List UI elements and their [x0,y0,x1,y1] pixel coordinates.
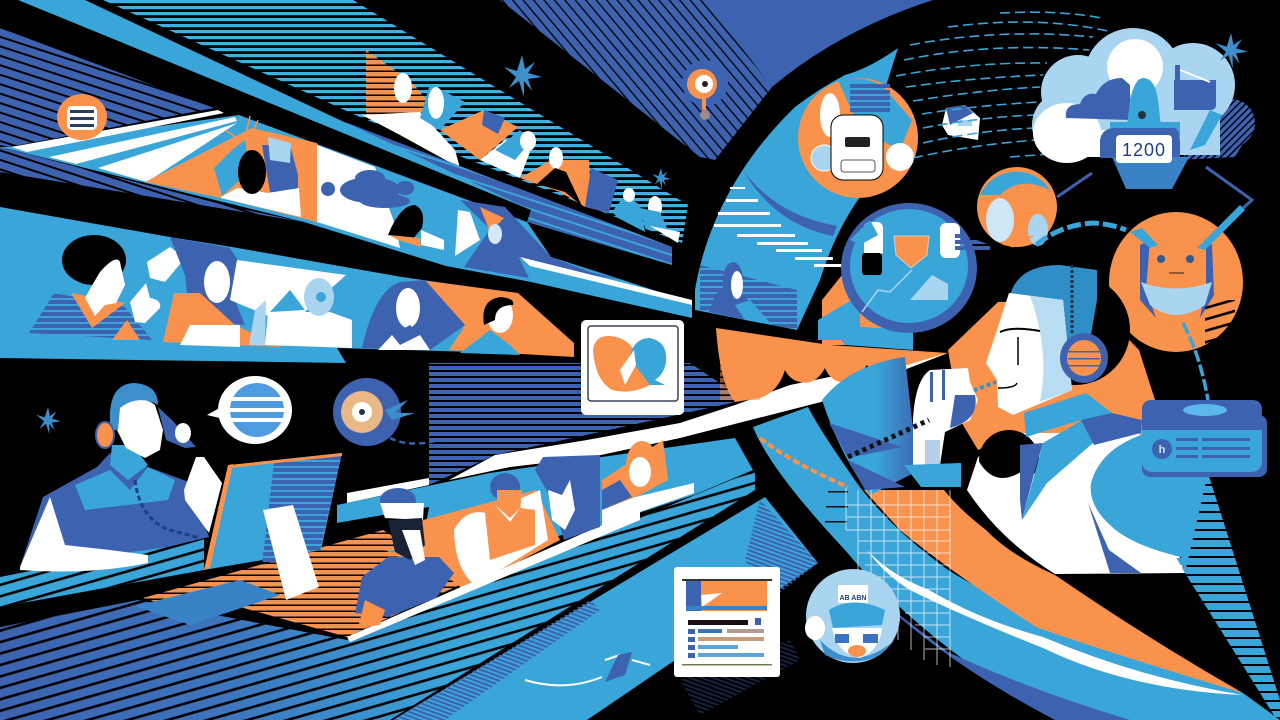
monitor [204,453,342,600]
dial icon [333,378,439,446]
counter display: 1200 [1122,140,1166,160]
white diagonal stripes [11,110,237,182]
white dashes [714,187,848,267]
hand [913,368,978,465]
keyboard [135,580,280,625]
white arm [20,497,148,571]
person three with mask [265,278,352,348]
face [986,293,1072,415]
small device icon [942,105,980,140]
counter base [1112,157,1189,189]
cloud with counter [1032,28,1255,189]
speech bubble [207,376,292,444]
panel: top striped band [103,0,688,243]
monitor stand [263,505,319,600]
woman [388,205,444,250]
seated person with orange vest [454,473,548,585]
white panel with cloud [317,145,400,248]
star small left [36,407,61,434]
dashed orange rope [760,438,848,487]
shoulder [1091,435,1208,573]
orange radiating burst [225,116,258,140]
arc: large band with orange and white sweep [753,407,1280,720]
panel: centre hatched block [429,363,745,485]
lower centre light blue strip with white [337,438,753,570]
light lens beside man [822,357,920,495]
cuff [904,463,961,487]
orange backdrop [948,300,1155,450]
circle: shield with headphones [841,203,990,333]
shirt [967,433,1185,574]
dashed connector [1036,223,1126,245]
star top right [1216,33,1248,69]
white sweep [867,550,1243,695]
black hatch beside grid [825,491,848,522]
circle: orange figure [977,167,1092,248]
headphone [1060,265,1108,383]
blue binder [535,455,600,540]
circle: shield panel backing [818,265,913,350]
hair [1009,265,1097,340]
neck [1024,393,1112,437]
person five [460,297,520,355]
panel: bottom hatched floor band [0,470,755,720]
person four [362,280,465,350]
dark cloud [1066,78,1130,120]
collar [1020,443,1043,520]
radio device [1142,400,1267,477]
person with notebook [214,137,301,217]
avatar with goggles: AB ABN [840,595,866,602]
head [116,399,163,458]
black divider above desk [0,507,429,627]
dark crescent [743,170,837,236]
shirt [20,453,209,567]
panel: lower blue ramp [393,497,818,720]
man and hooded figure [455,200,623,280]
white streak [520,257,692,305]
document card [674,567,780,677]
panel: orange scalloped wedge [716,328,948,402]
collar hole [979,430,1039,490]
man on phone [20,383,222,571]
star small centre [652,168,671,189]
dashed signal arcs [896,12,1112,158]
wire to radio [1183,323,1208,400]
mic cable [848,420,929,457]
man with headset [848,265,1208,574]
bell device [1100,78,1180,158]
grid overlay [846,488,950,667]
panel: right light blue arc area [695,48,898,330]
counter display [1116,135,1172,163]
arrow line to robot [1204,167,1252,243]
panel: second row scene [0,28,692,318]
panel: third row with people [0,207,574,363]
hatch behind seated person [700,265,797,330]
swirl [525,655,650,685]
document icon [1174,65,1216,110]
cord [135,480,200,538]
orange sweep [864,490,1243,693]
orange backdrop [145,128,317,222]
tablet icon [581,320,684,415]
radio device: h [1159,444,1166,456]
icon: eye target [682,60,728,120]
microphone [967,382,996,393]
orange office strip [362,50,680,243]
circle: robot device [798,78,918,198]
circle: orange robot head [1109,205,1245,352]
panel: light blue diagonal band [18,0,672,265]
headset [96,422,114,448]
neck [110,445,148,480]
seated person right [602,440,694,525]
robot body [811,115,914,180]
seated person [709,262,772,325]
icon: orange stack badge [57,94,107,140]
panel: top centre hatched wedge [500,0,933,160]
white swoosh [347,353,948,503]
orange hatched desk [143,490,640,642]
black ring [1020,275,1130,385]
hatched blue stripes lower right [1139,473,1280,717]
person one [29,235,185,340]
star top left [504,55,542,97]
phone [158,407,196,448]
hatched strip under second row [0,147,304,222]
seated person with mask [355,488,454,628]
desk hatch [0,537,204,607]
avatar with goggles [805,569,900,663]
person two [163,237,346,347]
